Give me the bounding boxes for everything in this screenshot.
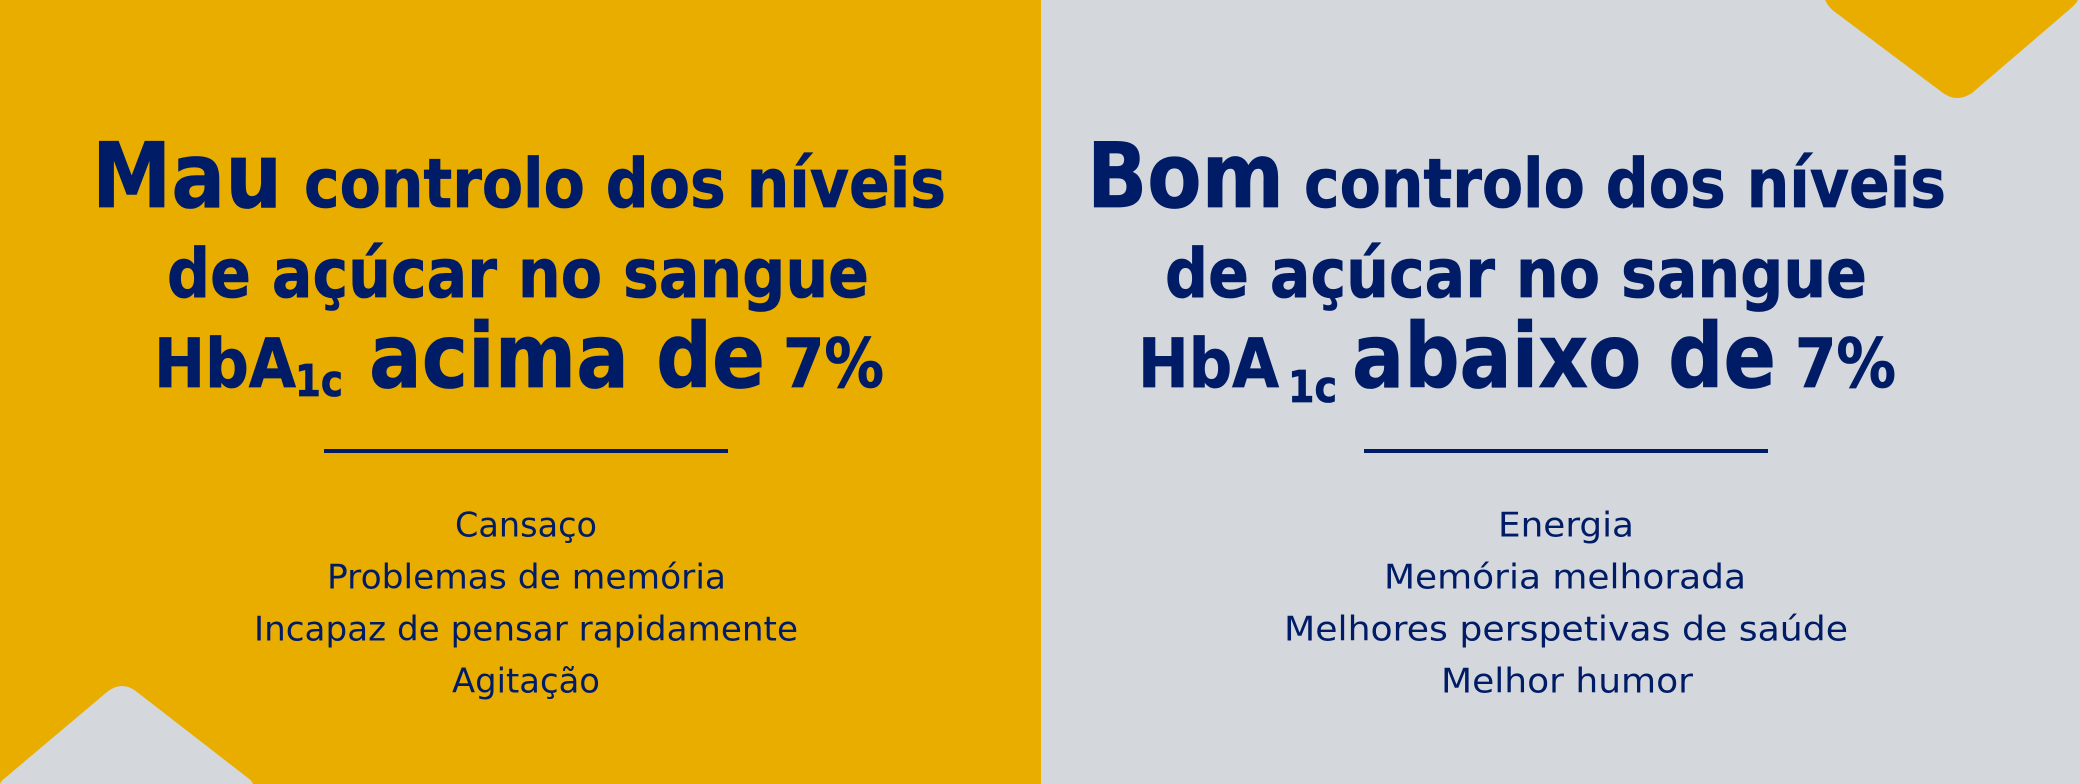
heading: good control: 7%: [1795, 325, 1896, 404]
heading: good control: abaixo de: [1352, 304, 1776, 408]
divider rule: [1364, 449, 1768, 453]
panel: good control: [1041, 0, 2080, 784]
decorative corner shape: gold rounded triangle: [1825, 0, 2078, 98]
list: benefits of good control: Melhores perspetivas de saúde: [1284, 610, 1848, 650]
panel: poor control: [0, 0, 1041, 784]
heading: good control: controlo dos níveis: [1304, 145, 1946, 224]
heading: poor control: 1c: [295, 356, 343, 407]
heading: poor control: controlo dos níveis: [304, 145, 946, 224]
list: symptoms of poor control: Problemas de memória: [327, 558, 726, 598]
heading: good control: 1c: [1288, 362, 1337, 413]
heading: poor control: HbA: [154, 325, 296, 404]
list: symptoms of poor control: Cansaço: [455, 506, 597, 546]
list: symptoms of poor control: [254, 506, 798, 702]
list: symptoms of poor control: Incapaz de pensar rapidamente: [254, 610, 798, 650]
decorative corner shape: grey rounded triangle: [0, 686, 253, 784]
list: benefits of good control: [1284, 506, 1848, 702]
heading: poor control: Mau: [92, 124, 282, 229]
list: benefits of good control: Melhor humor: [1441, 662, 1693, 702]
heading: poor control: [92, 124, 946, 408]
heading: poor control: 7%: [783, 325, 884, 404]
list: symptoms of poor control: Agitação: [452, 662, 600, 702]
heading: good control: Bom: [1087, 124, 1284, 229]
heading: good control: [1087, 124, 1946, 413]
heading: good control: de açúcar no sangue: [1165, 235, 1867, 314]
list: benefits of good control: Memória melhorada: [1384, 558, 1746, 598]
list: benefits of good control: Energia: [1498, 506, 1634, 546]
heading: poor control: de açúcar no sangue: [167, 235, 869, 314]
divider rule: [324, 449, 728, 453]
heading: poor control: acima de: [369, 304, 765, 408]
heading: good control: HbA: [1138, 325, 1279, 404]
